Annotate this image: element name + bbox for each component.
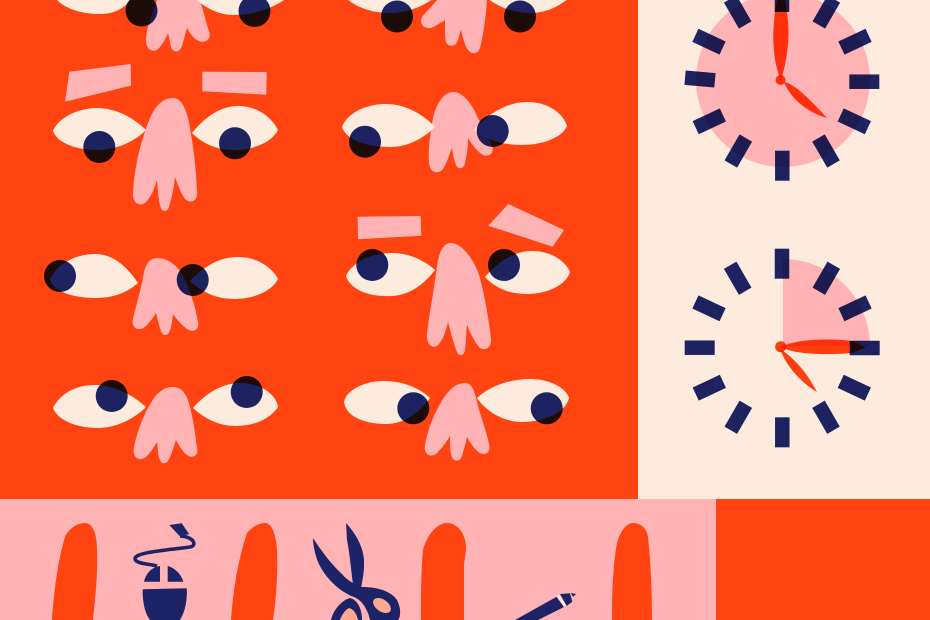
finger 1 <box>52 523 97 620</box>
panel: orange corner block <box>716 499 930 620</box>
finger 3 <box>421 523 466 620</box>
panel: tools strip <box>0 499 716 620</box>
face: bottom row left <box>53 376 278 463</box>
face: second row right <box>342 92 567 172</box>
face: third row right with eyebrows <box>346 204 570 355</box>
icon: computer mouse <box>135 523 194 620</box>
clock: quarter-past with pink wedge <box>685 249 880 447</box>
face: third row left <box>44 254 278 335</box>
finger 4 <box>612 523 652 620</box>
icon: pencil <box>515 593 576 620</box>
face: bottom row right <box>344 379 569 461</box>
finger 2 <box>231 523 277 620</box>
clock: four o'clock, full pink dial <box>684 0 879 181</box>
panel: clocks <box>638 0 930 499</box>
face: top right <box>342 0 574 53</box>
icon: scissors <box>313 523 400 620</box>
panel: faces <box>0 0 638 499</box>
face: second row left with eyebrows <box>53 64 278 211</box>
face: top left <box>50 0 290 51</box>
